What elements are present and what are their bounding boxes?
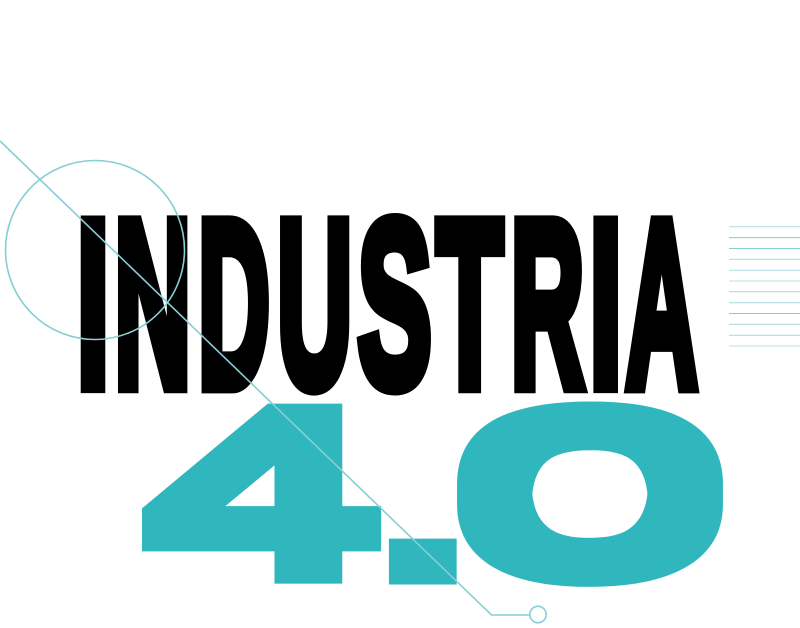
title: INDUSTRIA: S: [358, 173, 432, 437]
title: 4.0: 0: [453, 374, 727, 614]
decorative circle outline: [6, 160, 184, 340]
title: INDUSTRIA: I: [77, 172, 109, 436]
stacked horizontal lines at right: [729, 227, 800, 346]
title: INDUSTRIA: D: [198, 173, 270, 436]
title: 4.0: [142, 322, 727, 628]
title: INDUSTRIA: I: [589, 172, 622, 436]
connector line with end node: [0, 141, 546, 623]
title: INDUSTRIA: [77, 171, 697, 437]
title: INDUSTRIA: U: [277, 172, 352, 436]
title: INDUSTRIA: N: [114, 171, 191, 436]
title: INDUSTRIA: A: [626, 173, 697, 436]
title: INDUSTRIA: T: [437, 172, 503, 436]
title: INDUSTRIA: R: [511, 174, 584, 436]
title: 4.0: 4: [142, 365, 380, 622]
